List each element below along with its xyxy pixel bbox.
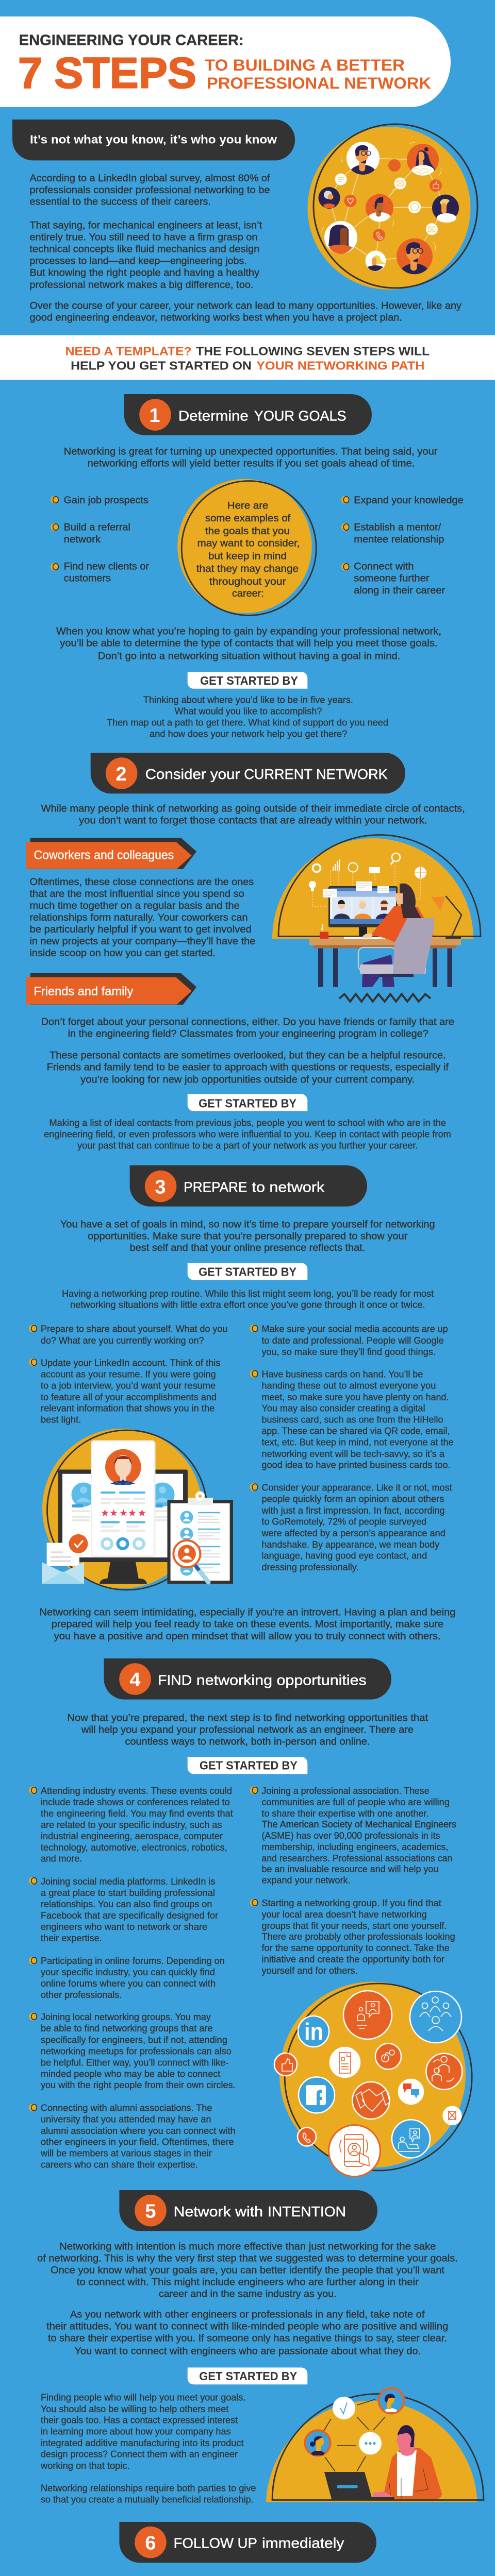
coworkers text: relationships form naturally. Your coworkers can xyxy=(30,912,248,923)
step 3 list left: relevant information that shows you in the xyxy=(41,1403,214,1414)
get started by button 2: GET STARTED BY xyxy=(199,1097,296,1110)
step 4 list left: Joining social media platforms. LinkedIn is xyxy=(41,1876,216,1887)
step 2 get started text: your past that can continue to be a part of your network as you further your career. xyxy=(77,1140,418,1150)
step 3 list right: meet, so make sure you have plenty on hand. xyxy=(262,1392,449,1402)
step 4 list left: include trade shows or conferences related to xyxy=(41,1797,230,1807)
step 5 intro: of networking. This is why the very first step that we suggested was to determine your goals. xyxy=(37,2252,458,2264)
illustration: video call desk xyxy=(272,835,481,987)
title banner: ENGINEERING YOUR CAREER: xyxy=(19,32,244,48)
goals callout circle: some examples of xyxy=(205,513,291,524)
step 1 closing text: Don’t go into a networking situation without having a goal in mind. xyxy=(98,650,400,662)
step 1 get started text xyxy=(107,694,388,739)
step 1 heading xyxy=(124,394,372,435)
step 3 closing text: Networking can seem intimidating, especially if you’re an introvert. Having a plan and being xyxy=(39,1607,455,1618)
step 1 heading: YOUR GOALS xyxy=(254,408,346,423)
step 5 get started text: their goals too. Has a contact expressed interest xyxy=(41,2415,238,2426)
step 4 list right: initiative and create the opportunity both for xyxy=(262,1954,444,1964)
step 3 list right: Have business cards on hand. You’ll be xyxy=(262,1369,423,1380)
goals callout circle: the goals that you xyxy=(205,526,290,537)
goals callout circle: throughout your xyxy=(209,576,286,587)
step 2 intro: you don’t want to forget those contacts that are already within your network. xyxy=(79,815,427,826)
template call-out band: THE FOLLOWING SEVEN STEPS WILL xyxy=(196,344,430,358)
illustration: online resume: ★ xyxy=(119,1508,128,1519)
step 5 intro xyxy=(37,2241,458,2357)
intro text: That saying, for mechanical engineers at least, isn’t xyxy=(30,220,262,231)
step 5 get started text: integrated additive manufacturing into its product xyxy=(41,2438,244,2448)
step 1 intro: Networking is great for turning up unexpected opportunities. That being said, your xyxy=(64,446,438,457)
coworkers text: that are the most influential since you spend so xyxy=(30,888,244,900)
step 1 closing text: you’ll be able to determine the type of contacts that will help you meet those goals. xyxy=(60,637,438,649)
step 4 list right: communities are full of people who are willing xyxy=(262,1797,450,1807)
step 3 get started text: networking situations with little extra effort once you’ve gone through it once or twice. xyxy=(70,1300,425,1310)
get started by button 5 xyxy=(188,2367,307,2384)
goals list left xyxy=(51,495,150,584)
step 5 intro: to share their expertise with you. If someone only has negative things to say, steer clear. xyxy=(48,2332,447,2344)
step 4 list left: engineers who want to network or share xyxy=(41,1922,207,1932)
step 4 list left: relationships. You can also find groups on xyxy=(41,1899,212,1909)
decorative zigzag xyxy=(339,994,431,1002)
step 3 intro xyxy=(60,1219,435,1253)
goals list right: mentee relationship xyxy=(354,534,444,545)
intro text: professionals consider professional networking to be xyxy=(30,184,270,196)
step 4 list left: alumni association where you can connect with xyxy=(41,2126,236,2136)
step 3 list right: Consider your appearance. Like it or not, most xyxy=(262,1483,452,1493)
intro heading pill: It’s not what you know, it’s who you know xyxy=(30,133,277,146)
goals list left: customers xyxy=(64,573,111,584)
intro heading pill xyxy=(12,120,295,160)
step 1 get started text: and how does your network help you get there? xyxy=(150,728,347,739)
template call-out band xyxy=(0,335,495,380)
friends and family text: Friends and family tend to be easier to approach with questions or requests, especially if xyxy=(47,1061,449,1073)
step 3 list left: to a job interview, you’d want your resume xyxy=(41,1381,216,1391)
get started by button 4 xyxy=(188,1757,307,1774)
step 4 list left: and more. xyxy=(41,1854,82,1864)
step 5 intro: Once you know what your goals are, you can better identify the people that you’ll want xyxy=(51,2265,445,2276)
intro text: essential to the success of their careers. xyxy=(30,196,211,207)
step 4 list left: technology, automotive, electronics, robotics, xyxy=(41,1842,227,1853)
step 2 intro: While many people think of networking as going outside of their immediate circle of contacts, xyxy=(41,803,465,815)
step 5 intro: to connect with. This might include engineers who are further along in their xyxy=(77,2276,419,2287)
illustration: online resume: ★ xyxy=(138,1508,146,1519)
goals list right: Establish a mentor/ xyxy=(354,522,441,533)
step 5 get started text: working on that topic. xyxy=(40,2461,130,2471)
step 6 heading: 6 xyxy=(145,2533,156,2554)
step 3 list right: text, etc. But keep in mind, not everyone at the xyxy=(262,1437,454,1448)
goals list right xyxy=(341,495,464,596)
step 4 heading: FIND xyxy=(158,1672,192,1688)
step 5 heading: INTENTION xyxy=(268,2204,346,2219)
intro text: good engineering endeavor, networking works best when you have a project plan. xyxy=(30,312,402,324)
get started by button 3: GET STARTED BY xyxy=(199,1265,296,1278)
step 4 list left: be helpful. Either way, you’ll connect with like- xyxy=(41,2057,228,2067)
goals callout circle: but keep in mind xyxy=(208,551,287,562)
step 4 list left: specifically for engineers, but if not, attending xyxy=(41,2035,227,2045)
title banner: PROFESSIONAL NETWORK xyxy=(207,74,431,92)
step 4 heading: 4 xyxy=(129,1669,141,1691)
step 2 get started text: Making a list of ideal contacts from previous jobs, people you went to school with who are in the xyxy=(50,1117,446,1128)
goals list left: Gain job prospects xyxy=(64,495,148,506)
step 3 intro: opportunities. Make sure that you’re personally prepared to show your xyxy=(88,1230,408,1242)
goals callout circle: that they may change xyxy=(196,563,299,574)
template call-out band: YOUR NETWORKING PATH xyxy=(256,359,424,372)
step 3 list left: best light. xyxy=(41,1414,81,1425)
step 3 list right: networking event will be tech-savvy, so it’s a xyxy=(262,1449,445,1459)
step 4 intro xyxy=(67,1713,428,1747)
step 1 get started text: Then map out a path to get there. What kind of support do you need xyxy=(107,718,388,728)
step 4 list right: (ASME) has over 90,000 professionals in its xyxy=(262,1831,440,1841)
step 3 intro: You have a set of goals in mind, so now it’s time to prepare yourself for networking xyxy=(60,1219,435,1230)
step 3 heading: PREPARE xyxy=(184,1179,247,1195)
step 4 list right: and researchers. Professional associations can xyxy=(262,1853,452,1863)
coworkers text: in new projects at your company—they’ll have the xyxy=(30,936,255,947)
step 3 heading: to network xyxy=(252,1179,325,1195)
step 4 list left: industrial engineering, aerospace, computer xyxy=(41,1831,223,1841)
step 1 closing text: When you know what you’re hoping to gain by expanding your professional network, xyxy=(56,625,441,637)
step 4 intro: countless ways to network, both in-person and online. xyxy=(125,1736,370,1747)
step 3 list right: you, so make sure they’ll find good things. xyxy=(262,1347,436,1357)
intro text: entirely true. You still need to have a firm grasp on xyxy=(30,231,258,243)
coworkers text: be particularly helpful if you want to get involved xyxy=(30,924,252,935)
step 3 list right: You may also consider creating a digital xyxy=(262,1403,425,1414)
step 4 list right xyxy=(250,1786,456,1976)
step 4 list right: for the same opportunity to connect. Take the xyxy=(262,1943,450,1953)
step 1 get started text: Thinking about where you’d like to be in five years. xyxy=(143,694,353,705)
step 4 intro: Now that you’re prepared, the next step is to find networking opportunities that xyxy=(67,1713,428,1724)
step 1 get started text: What would you like to accomplish? xyxy=(174,706,322,716)
friends and family text: Don’t forget about your personal connections, either. Do you have friends or family that are xyxy=(41,1016,454,1027)
step 5 get started text xyxy=(40,2393,256,2505)
step 6 heading: immediately xyxy=(262,2535,344,2551)
step 4 list left: will be members at various stages in their xyxy=(40,2148,212,2159)
step 4 list left: Participating in online forums. Depending on xyxy=(41,1956,225,1966)
step 3 list right: people quickly form an opinion about others xyxy=(262,1494,444,1504)
step 4 list right: groups that fit your needs, start one yourself. xyxy=(262,1921,447,1931)
step 3 list left: Update your LinkedIn account. Think of this xyxy=(41,1358,220,1368)
step 3 list right: handshake. By appearance, we mean body xyxy=(262,1539,439,1550)
step 1 intro: networking efforts will yield better results if you set goals ahead of time. xyxy=(88,457,415,469)
step 3 list right: Make sure your social media accounts are up xyxy=(262,1324,448,1334)
step 2 heading: Consider your xyxy=(145,766,240,782)
step 5 get started text: You should also be willing to help others meet xyxy=(41,2404,228,2414)
step 3 list left xyxy=(29,1324,227,1425)
friends and family text: These personal contacts are sometimes overlooked, but they can be a helpful resource. xyxy=(50,1049,446,1061)
title banner: 7 STEPS xyxy=(18,49,196,97)
get started by button 2 xyxy=(188,1094,307,1111)
step 1 closing text xyxy=(56,625,441,662)
step 4 list left: Attending industry events. These events could xyxy=(41,1786,232,1796)
goals callout circle: may want to consider, xyxy=(197,538,300,549)
step 1 heading: Determine xyxy=(178,408,249,423)
step 2 intro xyxy=(41,803,465,826)
goals callout circle: Here are xyxy=(227,500,268,511)
tag: friends and family xyxy=(26,973,196,1005)
step 3 list right: to GoRemotely, 72% of people surveyed xyxy=(262,1517,426,1527)
get started by button 3 xyxy=(188,1263,307,1280)
intro text: professional network makes a big difference, too. xyxy=(30,279,253,291)
intro text: processes to land—and keep—engineering jobs. xyxy=(30,256,247,267)
step 5 get started text: in learning more about how your company has xyxy=(41,2427,231,2437)
step 3 closing text: you have a positive and open mindset that will allow you to truly connect with others. xyxy=(54,1631,441,1642)
step 4 list left: online forums where you can connect with xyxy=(41,1978,216,1989)
step 5 intro: As you network with other engineers or professionals in any field, take note of xyxy=(70,2309,425,2320)
step 4 list left: the engineering field. You may find events that xyxy=(41,1808,233,1819)
step 2 get started text xyxy=(44,1117,451,1150)
goals list right: Connect with xyxy=(354,561,414,572)
step 4 intro: will help you expand your professional network as an engineer. There are xyxy=(81,1724,414,1735)
step 5 intro: You want to connect with engineers who are passionate about what they do. xyxy=(74,2345,421,2357)
goals list right: along in their career xyxy=(354,585,446,596)
step 4 list left: Facebook that are specifically designed for xyxy=(41,1910,218,1921)
step 4 list right: Starting a networking group. If you find that xyxy=(262,1898,441,1908)
goals list right: Expand your knowledge xyxy=(354,495,464,506)
step 3 list left: to feature all of your accomplishments and xyxy=(41,1392,217,1402)
step 4 list left: are related to your specific industry, such as xyxy=(41,1820,222,1830)
step 2 heading: CURRENT NETWORK xyxy=(244,766,388,782)
step 5 get started text: Finding people who will help you meet your goals. xyxy=(41,2393,245,2403)
illustration: man with laptop and network xyxy=(266,2388,484,2502)
illustration: online resume: ★ xyxy=(101,1508,109,1519)
step 3 list right: business card, such as one from the HiHello xyxy=(262,1414,443,1425)
step 4 list left: your specific industry, you can quickly find xyxy=(41,1967,215,1977)
step 5 intro: their attitudes. You want to connect with like-minded people who are positive and willing xyxy=(46,2320,448,2332)
step 4 list left: their expertise. xyxy=(41,1933,102,1943)
goals callout circle xyxy=(177,479,316,615)
step 4 list left xyxy=(29,1786,236,2170)
step 2 heading xyxy=(91,753,405,793)
step 4 list right: There are probably other professionals looking xyxy=(262,1931,455,1942)
get started by button 1 xyxy=(188,672,307,689)
step 6 heading xyxy=(119,2522,376,2563)
intro text: According to a LinkedIn global survey, almost 80% of xyxy=(30,173,270,184)
step 4 list right: Joining a professional association. These xyxy=(262,1786,430,1796)
step 3 list left: Prepare to share about yourself. What do you xyxy=(41,1324,227,1334)
goals list right: someone further xyxy=(354,573,430,584)
goals callout circle: career: xyxy=(232,588,264,599)
step 5 heading: Network with xyxy=(174,2204,263,2219)
tag: friends and family: Friends and family xyxy=(34,985,133,998)
step 3 list right: app. These can be shared via QR code, email, xyxy=(262,1426,450,1436)
template call-out band: HELP YOU GET STARTED ON xyxy=(71,359,252,372)
step 3 list right: with just a first impression. In fact, according xyxy=(261,1505,445,1516)
step 3 get started text: Having a networking prep routine. While this list might seem long, you’ll be ready for most xyxy=(62,1289,434,1299)
step 3 list right: were affected by a person’s appearance and xyxy=(261,1528,446,1538)
get started by button 5: GET STARTED BY xyxy=(199,2369,297,2383)
step 4 heading xyxy=(104,1658,391,1700)
step 4 list left: careers who can share their expertise. xyxy=(41,2160,198,2170)
step 5 heading xyxy=(119,2190,377,2231)
step 3 closing text xyxy=(39,1607,455,1642)
goals list left: Find new clients or xyxy=(64,561,150,572)
friends and family text xyxy=(41,1016,454,1085)
step 4 list right: your local area doesn’t have networking xyxy=(262,1909,427,1920)
step 5 intro: Networking with intention is much more effective than just networking for the sake xyxy=(59,2241,436,2252)
step 4 list left: other professionals. xyxy=(41,1990,122,2000)
step 1 heading: 1 xyxy=(149,405,160,427)
friends and family text: in the engineering field? Classmates from your engineering program in college? xyxy=(68,1028,428,1040)
step 3 list right: good idea to have printed business cards too. xyxy=(262,1460,451,1470)
step 3 heading xyxy=(130,1165,367,1207)
step 4 list left: networking meetups for professionals can also xyxy=(41,2046,232,2057)
step 2 heading: 2 xyxy=(116,764,127,785)
step 1 intro xyxy=(64,446,438,469)
intro text: But knowing the right people and having a healthy xyxy=(30,267,259,279)
illustration: online resume xyxy=(42,1429,233,1590)
illustration: online resume: ★ xyxy=(109,1508,118,1519)
step 3 list left: do? What are you currently working on? xyxy=(41,1335,204,1346)
intro text: Over the course of your career, your network can lead to many opportunities. However, like any xyxy=(30,300,461,311)
step 3 list right: handing these out to almost everyone you xyxy=(262,1381,436,1391)
step 4 list right: to share their expertise with one another. xyxy=(262,1808,428,1819)
step 3 closing text: prepared will help you feel ready to take on these events. Most importantly, make sure xyxy=(52,1619,443,1630)
title banner: TO BUILDING A BETTER xyxy=(205,56,405,74)
step 6 heading: FOLLOW UP xyxy=(174,2535,257,2551)
coworkers text xyxy=(30,876,255,959)
illustration: networking icons circle: in xyxy=(304,2018,323,2045)
step 4 list left: a great place to start building professional xyxy=(41,1888,215,1898)
coworkers text: inside scoop on how you can get started. xyxy=(30,947,216,959)
step 3 list right: dressing professionally. xyxy=(262,1562,359,1572)
step 3 list right xyxy=(250,1324,454,1572)
step 4 list right: The American Society of Mechanical Engineers xyxy=(262,1819,456,1829)
intro text xyxy=(30,173,461,324)
friends and family text: you’re looking for new job opportunities outside of your current company. xyxy=(80,1074,415,1085)
step 5 get started text: Networking relationships require both parties to give xyxy=(41,2483,256,2494)
coworkers text: much time together on a regular basis and the xyxy=(30,900,240,911)
step 3 list right: language, having good eye contact, and xyxy=(262,1551,427,1561)
step 3 intro: best self and that your online presence reflects that. xyxy=(130,1242,365,1253)
step 4 list right: yourself and for others. xyxy=(262,1965,358,1976)
step 4 heading: networking opportunities xyxy=(196,1672,367,1688)
step 2 get started text: engineering field, or even professors who were influential to you. Keep in contact with people from xyxy=(44,1129,451,1140)
step 4 list left: Joining local networking groups. You may xyxy=(41,2012,211,2022)
coworkers text: Oftentimes, these close connections are the ones xyxy=(30,876,254,888)
step 3 heading: 3 xyxy=(155,1177,166,1198)
step 5 get started text: so that you create a mutually beneficial relationship. xyxy=(41,2495,254,2505)
step 4 list left: minded people who may be able to connect xyxy=(41,2069,220,2079)
step 4 list left: you with the right people from their own circles. xyxy=(41,2080,236,2090)
illustration: people network circle xyxy=(307,124,477,290)
step 4 list left: Connecting with alumni associations. The xyxy=(41,2103,212,2113)
step 4 list left: other engineers in your field. Oftentimes, there xyxy=(41,2137,234,2147)
step 4 list right: membership, including engineers, academics, xyxy=(262,1842,448,1852)
step 4 list left: be able to find networking groups that are xyxy=(41,2023,213,2033)
step 4 list left: university that you attended may have an xyxy=(41,2114,211,2125)
step 3 list right: to date and professional. People will Google xyxy=(262,1335,444,1346)
step 3 get started text xyxy=(62,1289,434,1310)
intro text: technical concepts like fluid mechanics and design xyxy=(30,243,259,255)
tag: coworkers and colleagues xyxy=(26,838,196,869)
step 5 intro: career and in the same industry as you. xyxy=(159,2289,337,2300)
get started by button 1: GET STARTED BY xyxy=(200,674,298,687)
step 3 list left: account as your resume. If you were going xyxy=(41,1369,216,1380)
step 4 list right: be an invaluable resource and will help you xyxy=(262,1864,438,1874)
illustration: networking icons circle xyxy=(274,1981,472,2177)
get started by button 4: GET STARTED BY xyxy=(200,1758,298,1772)
step 5 get started text: design process? Connect them with an engineer xyxy=(41,2449,238,2460)
goals list left: network xyxy=(64,534,101,545)
goals list left: Build a referral xyxy=(64,522,130,533)
step 4 list right: expand your network. xyxy=(262,1875,351,1886)
template call-out band: NEED A TEMPLATE? xyxy=(65,344,192,358)
title banner xyxy=(0,16,451,107)
tag: coworkers and colleagues: Coworkers and colleagues xyxy=(34,848,174,862)
illustration: online resume: ★ xyxy=(128,1508,137,1519)
step 5 heading: 5 xyxy=(145,2201,156,2223)
